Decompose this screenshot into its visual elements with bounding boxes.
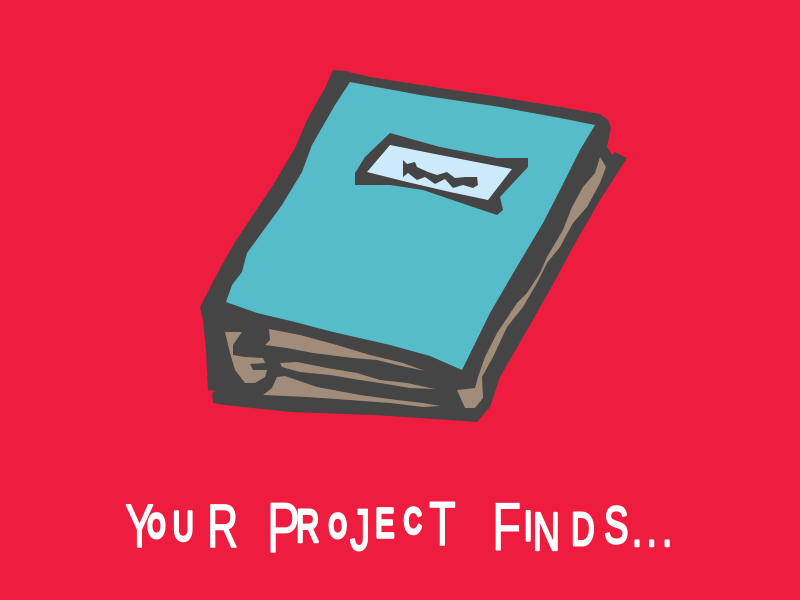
caption: Y	[125, 493, 154, 561]
caption: F	[492, 490, 521, 565]
caption: C	[404, 503, 422, 541]
caption: P	[267, 488, 300, 567]
caption: T	[429, 491, 456, 559]
caption: J	[350, 498, 370, 563]
label squiggle	[403, 160, 478, 188]
top page layer	[265, 329, 425, 371]
caption: .	[647, 502, 657, 558]
caption: E	[375, 501, 394, 546]
middle page layer	[280, 362, 435, 389]
caption: O	[329, 508, 346, 544]
caption: .	[662, 502, 672, 558]
cover label paper	[367, 145, 512, 200]
book cover	[226, 82, 595, 370]
caption: I	[524, 504, 532, 549]
caption: O	[148, 508, 165, 544]
caption: U	[173, 504, 194, 549]
caption: .	[632, 502, 642, 558]
icon: closed teal book	[200, 70, 627, 422]
caption: D	[571, 504, 594, 555]
cover label frame	[355, 133, 528, 215]
caption: R	[296, 501, 319, 552]
bottom page layer	[263, 376, 440, 407]
right page edge	[457, 157, 606, 408]
book outline silhouette	[200, 70, 627, 422]
binder ring pages	[225, 332, 267, 383]
caption: N	[533, 501, 560, 562]
caption: S	[604, 495, 628, 555]
caption: R	[207, 493, 238, 561]
